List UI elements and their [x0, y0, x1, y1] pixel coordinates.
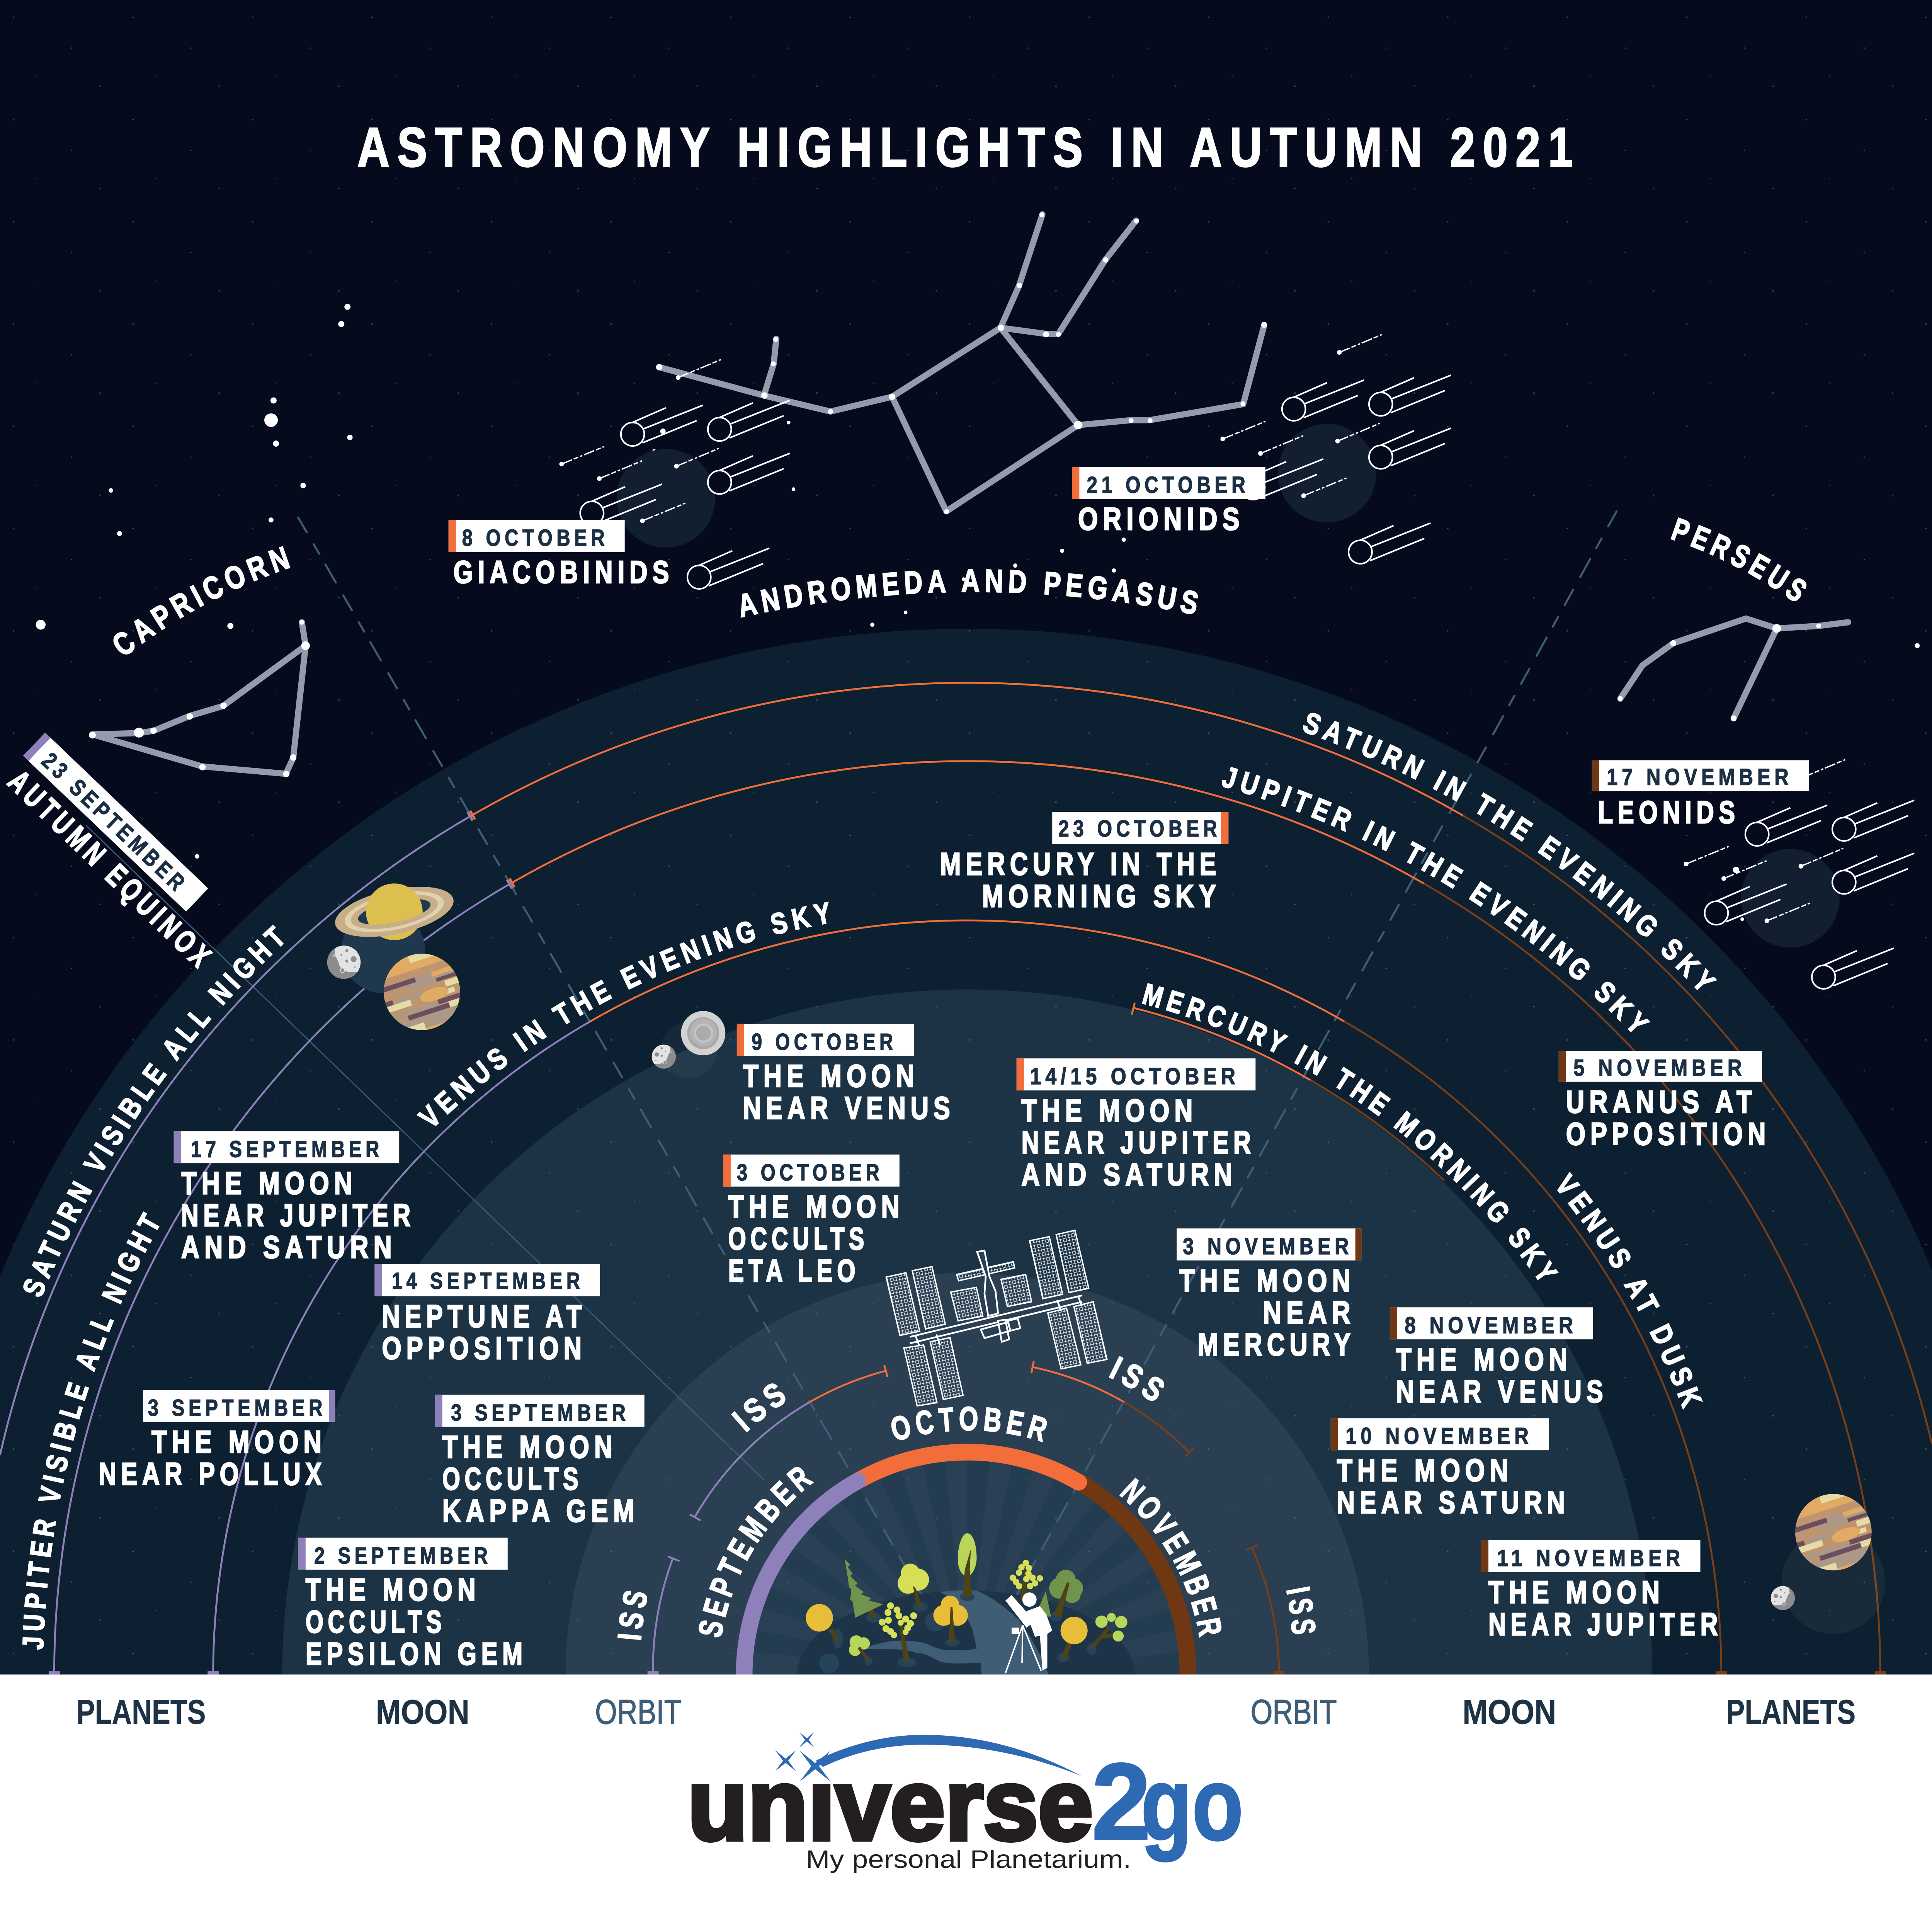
ISS orbit arcs: [648, 1361, 1284, 1675]
arc label: Saturn visible all night: SATURN VISIBLE ALL NIGHT: [16, 917, 295, 1301]
sky zones: concentric domes: [0, 629, 1932, 1786]
planet and moon visibility orbits: [0, 683, 1932, 1675]
event: 23 October Mercury in the morning sky: 23 OCTOBER: [1058, 815, 1221, 842]
event: 9 October Moon near Venus: NEAR VENUS: [743, 1090, 955, 1126]
event: 14/15 October Moon near Jupiter and Saturn: [1017, 1058, 1255, 1192]
meteor shower: Leonids: [1684, 760, 1914, 989]
constellation label: Perseus: PERSEUS: [1667, 511, 1817, 612]
event: 23 October Mercury in the morning sky: [940, 812, 1228, 914]
event: 17 September Moon near Jupiter and Saturn: AND SATURN: [181, 1230, 397, 1265]
event: 23 September autumn equinox: [1, 733, 221, 977]
arc label: Venus in the evening sky: VENUS IN THE EVENING SKY: [413, 895, 838, 1134]
constellation: Andromeda and Pegasus: [656, 212, 1267, 514]
logo: universe2go: My personal Planetarium.: [806, 1845, 1131, 1873]
event: 8 November Moon near Venus: THE MOON: [1396, 1342, 1572, 1377]
event: 17 November Leonids: 17 NOVEMBER: [1607, 764, 1793, 790]
event: 17 November Leonids: LEONIDS: [1598, 795, 1740, 830]
arc label: Mercury in the morning sky: MERCURY IN THE MORNING SKY: [1139, 978, 1566, 1293]
event: 17 September Moon near Jupiter and Saturn: NEAR JUPITER: [181, 1198, 415, 1233]
event: 8 November Moon near Venus: NEAR VENUS: [1396, 1374, 1608, 1409]
event: 3 October Moon occults Eta Leo: THE MOON: [728, 1189, 905, 1225]
event: 3 October Moon occults Eta Leo: OCCULTS: [728, 1221, 869, 1256]
event: 11 November Moon near Jupiter: [1481, 1540, 1723, 1642]
ISS labels: ISS: [611, 1583, 656, 1642]
autumn equinox line: [86, 825, 764, 1480]
arc label: Venus at dusk: VENUS AT DUSK: [1549, 1169, 1710, 1416]
ISS labels: ISS: [726, 1372, 796, 1439]
event: 2 September Moon occults Epsilon Gem: [298, 1538, 527, 1672]
event: 9 October Moon near Venus: THE MOON: [743, 1059, 919, 1094]
footer column labels: PLANETS: [1726, 1692, 1855, 1731]
arc label: Jupiter in the evening sky: JUPITER IN THE EVENING SKY: [1219, 760, 1658, 1044]
event: 5 November Uranus at opposition: OPPOSITION: [1566, 1116, 1770, 1151]
logo: universe2go: [687, 1732, 1243, 1873]
event: 14/15 October Moon near Jupiter and Saturn: AND SATURN: [1021, 1157, 1237, 1192]
hill with river: [797, 1590, 1135, 1758]
month labels: NOVEMBER: [1114, 1472, 1230, 1643]
event: 3 November Moon near Mercury: [1177, 1228, 1362, 1362]
event: 3 October Moon occults Eta Leo: ETA LEO: [728, 1253, 860, 1288]
event: 8 November Moon near Venus: [1390, 1307, 1608, 1409]
month labels: [691, 1400, 1230, 1643]
event: 14/15 October Moon near Jupiter and Saturn: 14/15 OCTOBER: [1030, 1063, 1240, 1089]
month divider dashed lines: [298, 511, 1617, 1602]
event: 11 November Moon near Jupiter: THE MOON: [1488, 1575, 1665, 1610]
event: 3 September Moon near Pollux: 3 SEPTEMBER: [148, 1395, 327, 1421]
event: 3 November Moon near Mercury: NEAR: [1263, 1295, 1355, 1330]
planet group: Venus and Moon: [652, 1011, 725, 1078]
event: 5 November Uranus at opposition: [1559, 1051, 1770, 1151]
meteor shower: Giacobinids: [559, 360, 790, 589]
event: 8 October Giacobinids: [449, 520, 674, 590]
event: 10 November Moon near Saturn: [1331, 1418, 1570, 1520]
title: ASTRONOMY HIGHLIGHTS IN AUTUMN 2021: [357, 116, 1581, 178]
footer column labels: PLANETS: [77, 1692, 206, 1731]
event: 3 September Moon near Pollux: THE MOON: [151, 1425, 327, 1460]
event: 8 October Giacobinids: GIACOBINIDS: [453, 554, 674, 590]
event: 11 November Moon near Jupiter: 11 NOVEMBER: [1497, 1545, 1684, 1571]
event: 3 September Moon occults Kappa Gem: [435, 1395, 645, 1529]
event: 8 October Giacobinids: 8 OCTOBER: [462, 525, 609, 551]
arc label: Jupiter visible all night: JUPITER VISIBLE ALL NIGHT: [17, 1205, 170, 1650]
icon: international space station: [886, 1230, 1107, 1406]
event: 5 November Uranus at opposition: 5 NOVEMBER: [1573, 1054, 1746, 1081]
logo: universe2go: 2: [1092, 1741, 1151, 1862]
event: 23 October Mercury in the morning sky: MERCURY IN THE: [940, 847, 1221, 882]
constellation label: Capricorn: CAPRICORN: [105, 538, 298, 663]
event: 10 November Moon near Saturn: 10 NOVEMBER: [1345, 1423, 1533, 1449]
event: 23 October Mercury in the morning sky: MORNING SKY: [982, 879, 1221, 914]
event: 3 October Moon occults Eta Leo: 3 OCTOBER: [737, 1159, 883, 1185]
event: 9 October Moon near Venus: 9 OCTOBER: [752, 1029, 897, 1055]
planet group: Saturn, Moon, Jupiter: [327, 871, 479, 1043]
event: 3 September Moon occults Kappa Gem: OCCULTS: [442, 1461, 583, 1497]
logo: universe2go: go: [1141, 1746, 1243, 1862]
event: 3 November Moon near Mercury: MERCURY: [1197, 1327, 1355, 1362]
trees: [806, 1533, 1128, 1667]
event: 3 September Moon occults Kappa Gem: 3 SEPTEMBER: [451, 1400, 629, 1426]
event: 11 November Moon near Jupiter: NEAR JUPITER: [1488, 1607, 1723, 1642]
event: 2 September Moon occults Epsilon Gem: OCCULTS: [306, 1604, 446, 1639]
white footer: [0, 1675, 1932, 1932]
constellation label: Andromeda and Pegasus: ANDROMEDA AND PEGASUS: [735, 563, 1206, 624]
event: 9 October Moon near Venus: [737, 1024, 955, 1126]
event: 3 November Moon near Mercury: THE MOON: [1179, 1263, 1355, 1298]
event: 21 October Orionids: [1072, 467, 1265, 537]
event: 17 September Moon near Jupiter and Saturn: [174, 1131, 415, 1265]
constellation: Capricorn: [89, 620, 310, 777]
ISS labels: [611, 1350, 1323, 1642]
event: 14/15 October Moon near Jupiter and Saturn: NEAR JUPITER: [1021, 1125, 1255, 1160]
event: 14/15 October Moon near Jupiter and Saturn: THE MOON: [1021, 1093, 1197, 1128]
ISS labels: ISS: [1279, 1584, 1323, 1640]
event: 14 September Neptune at opposition: OPPOSITION: [382, 1331, 587, 1366]
event: 8 November Moon near Venus: 8 NOVEMBER: [1405, 1312, 1577, 1338]
event: 21 October Orionids: 21 OCTOBER: [1087, 472, 1249, 498]
event: 3 September Moon occults Kappa Gem: THE MOON: [442, 1429, 617, 1464]
planet group: Jupiter and Moon lower right: [1771, 1481, 1890, 1634]
footer column labels: ORBIT: [1251, 1692, 1337, 1731]
event: 3 September Moon near Pollux: [99, 1390, 335, 1492]
astronomer with telescope: [1005, 1592, 1052, 1673]
event: 2 September Moon occults Epsilon Gem: THE MOON: [306, 1572, 481, 1607]
event: 23 September autumn equinox: 23 SEPTEMBER: [37, 747, 193, 898]
footer column labels: MOON: [1463, 1692, 1556, 1731]
arc label: Saturn in the evening sky: SATURN IN THE EVENING SKY: [1299, 706, 1725, 1002]
bright stars: [36, 304, 1920, 921]
event: 3 September Moon occults Kappa Gem: KAPPA GEM: [442, 1493, 639, 1529]
meteor shower: Orionids: [1220, 335, 1451, 564]
event: 2 September Moon occults Epsilon Gem: 2 SEPTEMBER: [314, 1543, 492, 1569]
event: 17 September Moon near Jupiter and Saturn: THE MOON: [181, 1166, 357, 1201]
footer column labels: [77, 1692, 1855, 1731]
logo: universe2go: universe: [687, 1748, 1093, 1861]
event: 10 November Moon near Saturn: THE MOON: [1337, 1453, 1513, 1488]
event: 14 September Neptune at opposition: [374, 1264, 600, 1366]
event: 14 September Neptune at opposition: 14 SEPTEMBER: [392, 1267, 584, 1294]
footer column labels: MOON: [376, 1692, 469, 1731]
month labels: OCTOBER: [887, 1400, 1056, 1450]
event: 23 September autumn equinox: AUTUMN EQUINOX: [1, 764, 221, 977]
month labels: SEPTEMBER: [691, 1456, 821, 1640]
event: 21 October Orionids: ORIONIDS: [1078, 502, 1245, 537]
event: 5 November Uranus at opposition: URANUS AT: [1566, 1084, 1757, 1119]
constellation: Perseus: [1618, 619, 1848, 721]
event: 3 September Moon near Pollux: NEAR POLLUX: [99, 1456, 327, 1492]
event: 3 November Moon near Mercury: 3 NOVEMBER: [1183, 1233, 1353, 1259]
event: 17 September Moon near Jupiter and Saturn: 17 SEPTEMBER: [191, 1136, 383, 1162]
ISS labels: ISS: [1104, 1350, 1175, 1412]
event: 3 October Moon occults Eta Leo: [723, 1155, 905, 1288]
event: 14 September Neptune at opposition: NEPTUNE AT: [382, 1299, 587, 1334]
event: 10 November Moon near Saturn: NEAR SATURN: [1337, 1485, 1570, 1520]
month arcs: [744, 1452, 1188, 1678]
footer column labels: ORBIT: [595, 1692, 681, 1731]
event: 2 September Moon occults Epsilon Gem: EPSILON GEM: [306, 1636, 527, 1672]
event: 17 November Leonids: [1592, 760, 1809, 830]
